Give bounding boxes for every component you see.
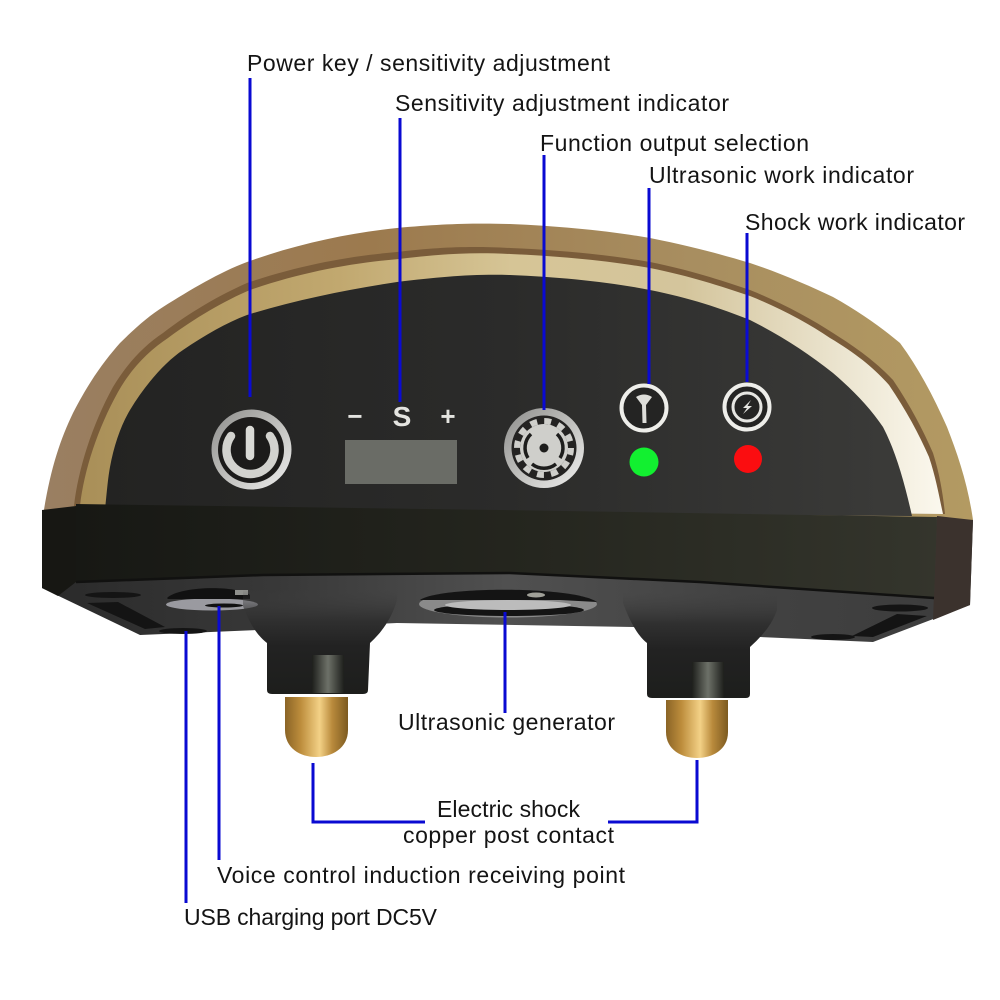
callout: power key: Power key / sensitivity adjustment: [247, 50, 611, 76]
right side face: [933, 516, 973, 620]
right copper post: [623, 578, 777, 758]
icon: ultrasonic indicator: [622, 386, 666, 430]
callout: shock indicator: Shock work indicator: [745, 209, 965, 235]
callout: USB charging port: USB charging port DC5V: [184, 904, 438, 930]
sensitivity display: [345, 440, 457, 484]
icon: shock indicator: [724, 384, 770, 430]
voice receiver recess: [166, 588, 258, 610]
ultrasonic generator recess: [419, 590, 597, 618]
callout: function output: Function output selection: [540, 130, 809, 156]
left side face: [42, 506, 76, 596]
left copper post: [243, 575, 397, 757]
callout: voice control point: Voice control induction receiving point: [217, 862, 626, 888]
left vent ovals and slot: [85, 592, 207, 634]
sensitivity minus S plus markings: [347, 401, 456, 432]
sensitivity minus S plus markings: S: [393, 401, 411, 432]
callout: copper post contact: [313, 760, 697, 848]
sensitivity minus S plus markings: +: [440, 401, 456, 431]
collar device: [42, 224, 973, 758]
shock red LED: [734, 445, 762, 473]
callout: ultrasonic generator: Ultrasonic generator: [398, 709, 615, 735]
icon: function gear button: [504, 408, 584, 488]
callout: copper post contact: copper post contact: [403, 822, 615, 848]
callout: copper post contact: Electric shock: [437, 796, 580, 822]
lower body plate: [42, 510, 973, 642]
front face: [76, 504, 937, 598]
callout: ultrasonic indicator: Ultrasonic work indicator: [649, 162, 914, 188]
sensitivity minus S plus markings: −: [347, 401, 363, 431]
black control panel: [105, 275, 912, 516]
ultrasonic green LED: [630, 448, 658, 476]
gold shell light band: [74, 247, 945, 514]
icon: power button: [212, 410, 292, 490]
right vent ovals and slot: [811, 604, 928, 640]
callout: sensitivity indicator: Sensitivity adjustment indicator: [395, 90, 729, 116]
gold shell outer: [43, 224, 973, 520]
